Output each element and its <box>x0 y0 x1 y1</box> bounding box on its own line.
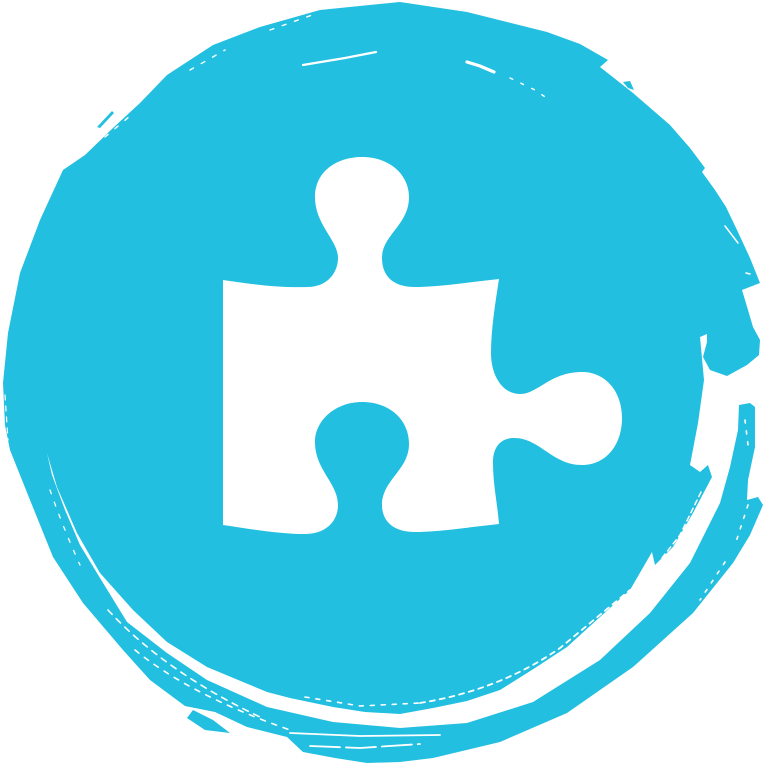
icon: puzzle piece <box>223 157 622 534</box>
brush stroke fragment: lower-left tail <box>187 710 230 733</box>
brush stroke fragment: upper-right wisp <box>623 81 634 90</box>
brush stroke fragment: upper-left wisp <box>97 111 114 128</box>
